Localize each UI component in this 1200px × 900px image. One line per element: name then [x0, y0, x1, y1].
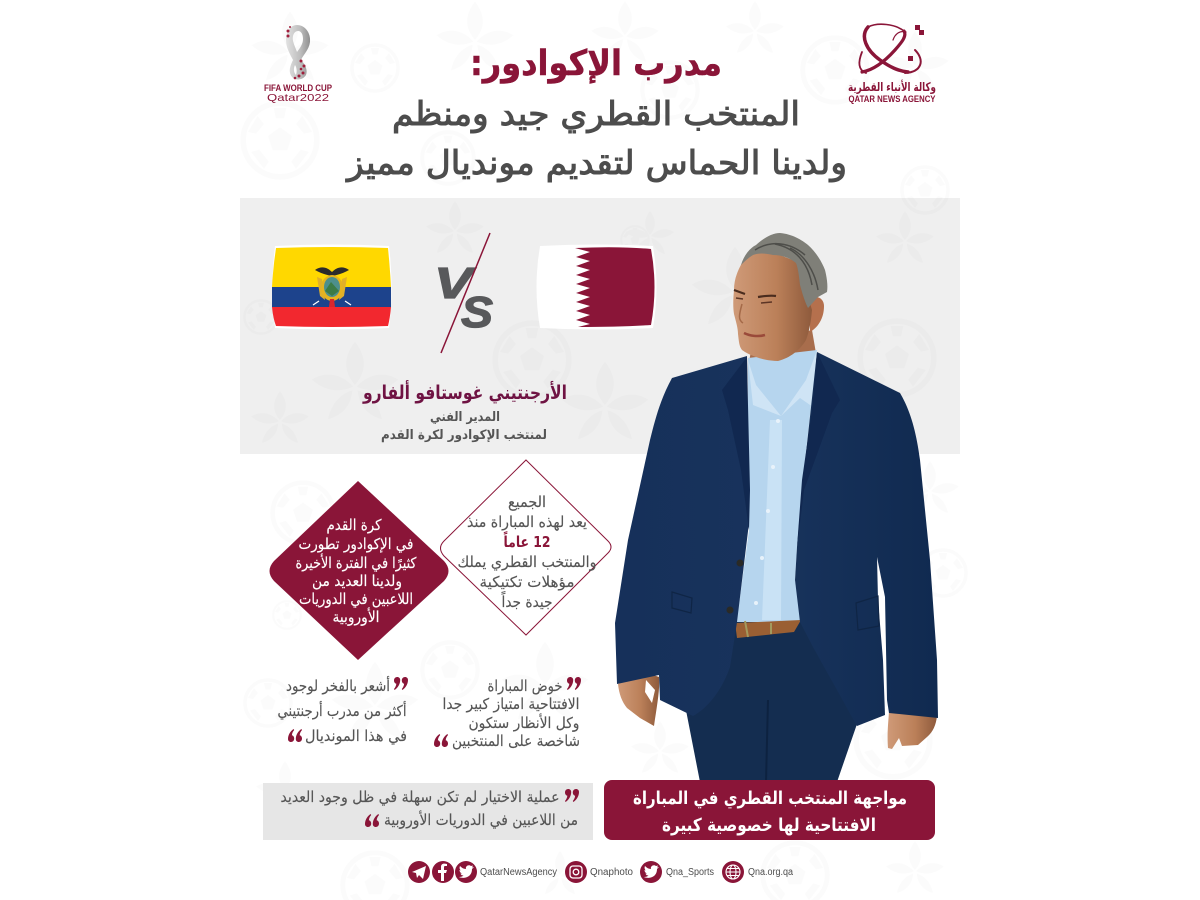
- diamond: preparing for the match: 12 عاماً: [503, 531, 550, 551]
- diamond: preparing for the match: جيدة جداً: [501, 591, 552, 611]
- versus mark: [434, 233, 493, 353]
- quote: proud of Argentine coaches: [278, 676, 408, 746]
- social media row: [408, 861, 793, 883]
- versus mark: V: [434, 259, 477, 308]
- title: المنتخب القطري جيد ومنظم: [392, 94, 800, 133]
- title: مدرب الإكوادور:: [470, 44, 722, 84]
- lapels: [722, 352, 840, 547]
- icon: twitter sports: [640, 861, 662, 883]
- quote: opening match privilege: [434, 677, 581, 750]
- diamond: Ecuadorian football: في الإكوادور تطورت: [298, 535, 414, 554]
- icon: facebook: [432, 861, 454, 883]
- logo: Qatar News Agency: QATAR NEWS AGENCY: [848, 94, 936, 104]
- quote: proud of Argentine coaches: أشعر بالفخر لوجود: [286, 676, 390, 695]
- callout: Qatar team in the opening match: الافتتاحية لها خصوصية كبيرة: [662, 815, 876, 836]
- coach name and role: المدير الفني: [430, 410, 500, 425]
- quote: opening match privilege: خوض المباراة: [488, 677, 562, 695]
- head: [733, 252, 812, 361]
- diamond: preparing for the match: مؤهلات تكتيكية: [480, 573, 574, 591]
- diamond: preparing for the match: يعد لهذه المباراة منذ: [467, 513, 587, 531]
- diamond: preparing for the match: الجميع: [508, 493, 546, 511]
- handle: Qna_Sports: Qna_Sports: [666, 867, 714, 878]
- diamond: Ecuadorian football: الأوروبية: [332, 607, 380, 626]
- hair: [741, 233, 827, 308]
- logo: FIFA World Cup Qatar 2022: [264, 25, 332, 104]
- right hand: [888, 712, 937, 749]
- flag: Ecuador: [272, 244, 392, 330]
- coach name and role: لمنتخب الإكوادور لكرة القدم: [381, 428, 547, 443]
- coach name and role: [362, 380, 567, 443]
- handle: QatarNewsAgency: QatarNewsAgency: [480, 867, 557, 878]
- diamond: Ecuadorian football: كرة القدم: [326, 516, 382, 534]
- neck: [748, 330, 818, 418]
- jacket buttons and pockets: [672, 592, 879, 630]
- trousers: [684, 622, 857, 782]
- quote: proud of Argentine coaches: أكثر من مدرب أرجنتيني: [278, 701, 406, 721]
- logo: Qatar News Agency: [848, 24, 936, 104]
- logo: Qatar News Agency: وكالة الأنباء القطرية: [848, 79, 936, 95]
- handle: Qnaphoto: Qnaphoto: [590, 867, 633, 878]
- flag: Qatar: [536, 244, 656, 330]
- logo: FIFA World Cup Qatar 2022: FIFA WORLD CUP: [264, 83, 332, 93]
- collar: [748, 350, 817, 416]
- quote panel: selection process: عملية الاختيار لم تكن سهلة في ظل وجود العديد: [280, 788, 560, 807]
- title: ولدينا الحماس لتقديم مونديال مميز: [345, 143, 847, 182]
- jacket: [615, 352, 938, 726]
- coach figure: [615, 233, 938, 782]
- coach name and role: الأرجنتيني غوستافو ألفارو: [362, 380, 567, 404]
- grey match band: [240, 198, 960, 454]
- quote: proud of Argentine coaches: في هذا المونديال: [305, 727, 407, 746]
- diamond: preparing for the match: [440, 460, 611, 635]
- left hand: [618, 671, 659, 726]
- diamond: Ecuadorian football: [270, 481, 448, 660]
- callout: Qatar team in the opening match: مواجهة المنتخب القطري في المباراة: [633, 788, 907, 809]
- face features: [734, 290, 776, 297]
- title: [345, 44, 847, 182]
- quote: opening match privilege: وكل الأنظار ستكون: [468, 713, 580, 732]
- belt: [735, 620, 801, 638]
- icon: instagram: [565, 861, 587, 883]
- quote: opening match privilege: شاخصة على المنتخبين: [452, 732, 580, 750]
- quote panel: selection process: [263, 783, 593, 840]
- icon: twitter: [455, 861, 477, 883]
- logo: FIFA World Cup Qatar 2022: Qatar2022: [267, 92, 329, 104]
- diamond: preparing for the match: والمنتخب القطري يملك: [458, 553, 596, 572]
- icon: globe: [722, 861, 744, 883]
- diamond: Ecuadorian football: ولدينا العديد من: [312, 572, 402, 590]
- shirt: [736, 350, 817, 622]
- ear: [810, 297, 824, 332]
- versus mark: S: [461, 288, 493, 337]
- diamond: Ecuadorian football: كثيرًا في الفترة الأخيرة: [296, 553, 417, 573]
- icon: telegram: [408, 861, 430, 883]
- quote panel: selection process: من اللاعبين في الدوريات الأوروبية: [384, 810, 578, 830]
- handle: website: Qna.org.qa: [748, 867, 793, 878]
- diamond: Ecuadorian football: اللاعبين في الدوريات: [299, 590, 413, 609]
- icon: Ecuador coat of arms: [313, 267, 351, 307]
- quote: opening match privilege: الافتتاحية امتياز كبير جدا: [442, 695, 580, 713]
- callout: Qatar team in the opening match: [604, 780, 935, 840]
